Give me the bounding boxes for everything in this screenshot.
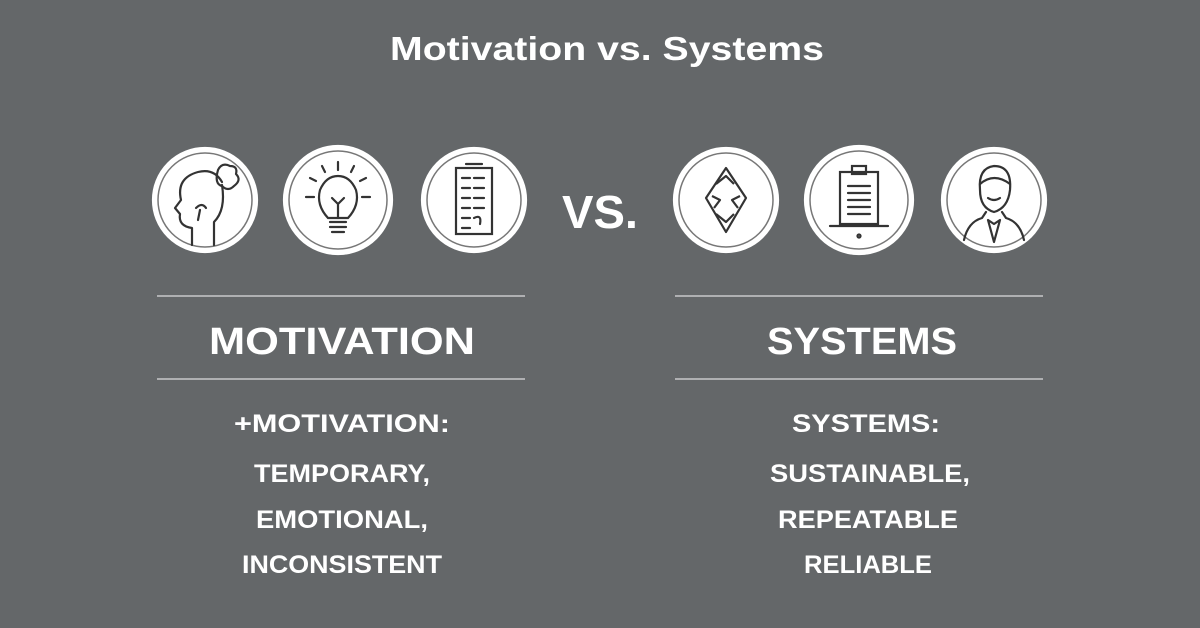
icon: checklist — [422, 148, 526, 252]
list: motivation traits: +MOTIVATION: — [234, 410, 450, 438]
list: systems traits: SUSTAINABLE, — [770, 460, 970, 488]
heading: systems: SYSTEMS — [767, 321, 957, 363]
list: systems traits: SYSTEMS: — [792, 410, 940, 438]
list: systems traits: RELIABLE — [804, 551, 932, 579]
icon: clipboard — [805, 146, 913, 254]
left panel: motivation — [157, 296, 525, 579]
icon: arrows — [674, 148, 778, 252]
title: Motivation vs. Systems — [390, 30, 824, 67]
list: motivation traits: TEMPORARY, — [254, 460, 430, 488]
vs label: VS. — [562, 186, 638, 238]
list: motivation traits: INCONSISTENT — [242, 551, 442, 579]
list: systems traits: REPEATABLE — [778, 506, 958, 534]
list: systems traits — [770, 410, 970, 579]
heading: motivation: MOTIVATION — [209, 321, 475, 363]
icon: head with brain — [153, 148, 257, 252]
list: motivation traits — [234, 410, 450, 579]
icon: lightbulb — [284, 146, 392, 254]
right panel: systems — [675, 296, 1043, 579]
icon: person — [942, 148, 1046, 252]
list: motivation traits: EMOTIONAL, — [256, 506, 428, 534]
